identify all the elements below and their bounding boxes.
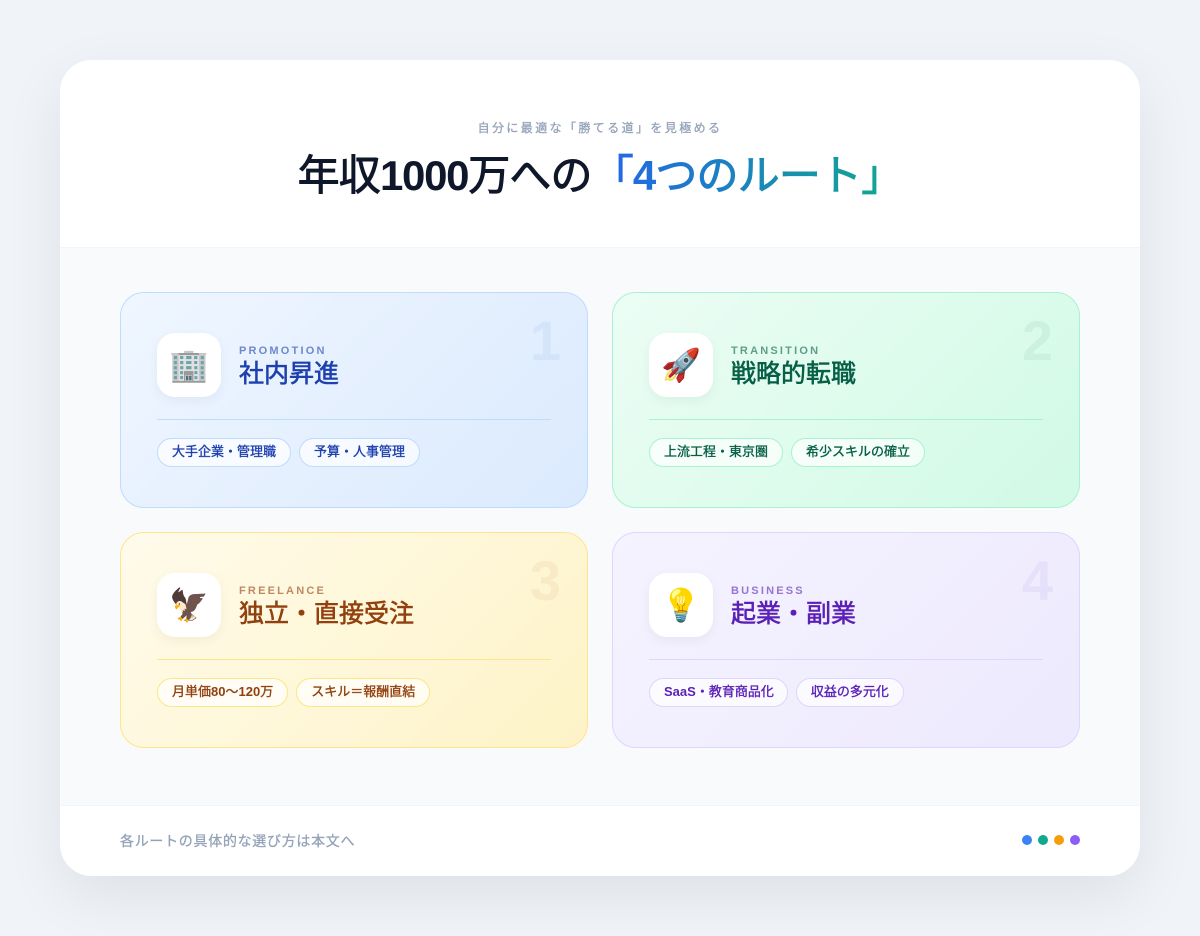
number 3: 3 <box>530 549 561 612</box>
heading: route 4: 起業・副業 <box>731 600 856 628</box>
heading: route 1: 社内昇進 <box>239 360 339 388</box>
panel: route 3 freelance <box>120 532 588 748</box>
tags: route 3 <box>157 678 430 707</box>
icon: rocket: 🚀 <box>661 346 701 384</box>
icon: eagle <box>157 573 221 637</box>
number 1: 1 <box>530 309 561 372</box>
icon: light bulb <box>649 573 713 637</box>
icon: office building: 🏢 <box>169 346 209 384</box>
footer note: 各ルートの具体的な選び方は本文へ <box>120 833 355 849</box>
panel: route 2 transition <box>612 292 1080 508</box>
heading: route 2: 戦略的転職 <box>731 360 856 388</box>
tags: route 4 <box>649 678 904 707</box>
label: transition: TRANSITION <box>731 345 820 357</box>
label: promotion: PROMOTION <box>239 345 327 357</box>
tags: route 2: 上流工程・東京圏 <box>664 444 768 459</box>
icon: eagle: 🦅 <box>169 586 209 624</box>
footer <box>60 805 1140 876</box>
colour dots <box>1022 835 1080 845</box>
icon: light bulb: 💡 <box>661 586 701 624</box>
header <box>60 60 1140 248</box>
number 4: 4 <box>1022 549 1053 612</box>
tags: route 1: 予算・人事管理 <box>314 444 405 459</box>
heading: route 3: 独立・直接受注 <box>239 600 414 628</box>
tags: route 4: 収益の多元化 <box>811 684 889 699</box>
icon: office building <box>157 333 221 397</box>
tags: route 2 <box>649 438 925 467</box>
title: 年収1000万への「4つのルート」 <box>298 152 902 199</box>
main sheet <box>60 60 1140 876</box>
subtitle: 自分に最適な「勝てる道」を見極める <box>478 121 722 135</box>
panel: route cards area <box>60 248 1140 805</box>
tags: route 1 <box>157 438 420 467</box>
icon: rocket <box>649 333 713 397</box>
number 2: 2 <box>1022 309 1053 372</box>
label: freelance: FREELANCE <box>239 585 326 597</box>
panel: route 1 promotion <box>120 292 588 508</box>
tags: route 2: 希少スキルの確立 <box>806 444 910 459</box>
panel: route 4 business <box>612 532 1080 748</box>
tags: route 3: スキル＝報酬直結 <box>311 684 415 699</box>
tags: route 1: 大手企業・管理職 <box>172 444 276 459</box>
tags: route 4: SaaS・教育商品化 <box>664 684 774 699</box>
label: business: BUSINESS <box>731 585 805 597</box>
tags: route 3: 月単価80〜120万 <box>172 684 273 699</box>
